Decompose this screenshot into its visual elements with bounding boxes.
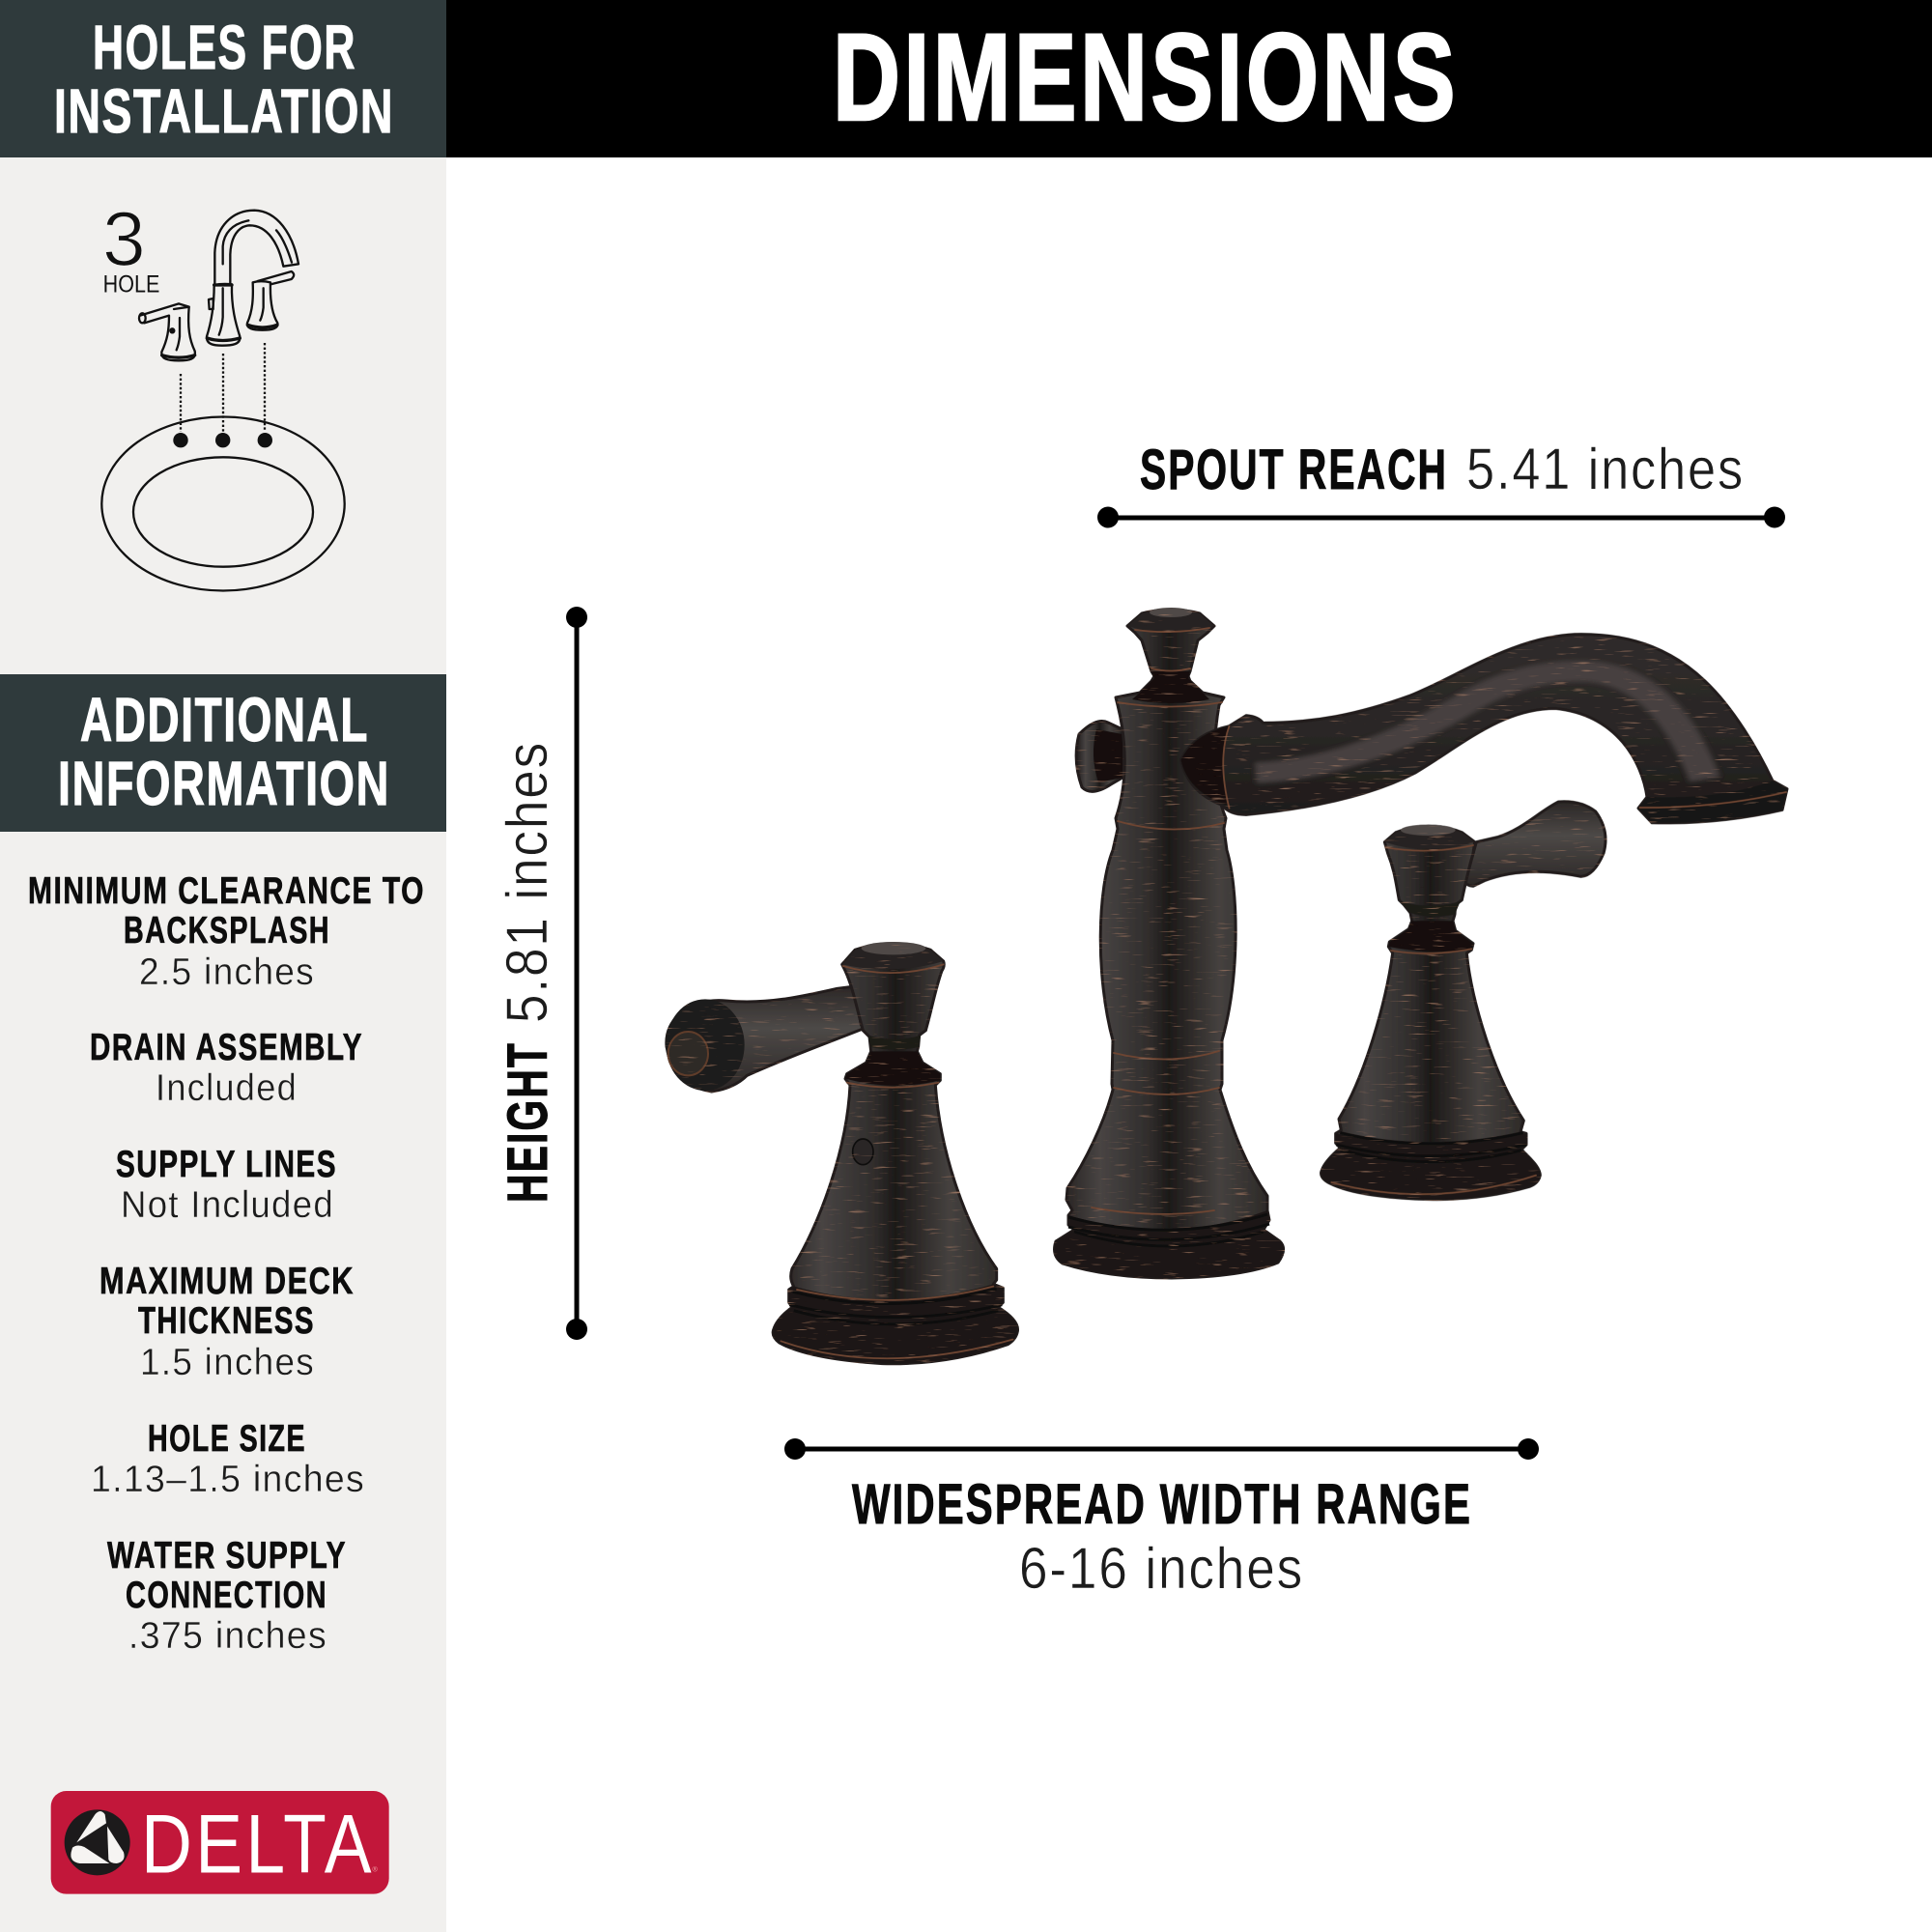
text block: water supply connection: WATER SUPPLY <box>107 1535 347 1577</box>
panel: sidebar background <box>0 0 446 1932</box>
text block: maximum deck thickness: THICKNESS <box>138 1300 315 1342</box>
dimension: spout reach: 5.41 inches <box>1466 437 1745 501</box>
text block: water supply connection: .375 inches <box>128 1615 327 1657</box>
dimension: height <box>495 607 587 1340</box>
dimension: widespread width range: WIDESPREAD WIDTH RANGE <box>852 1473 1472 1536</box>
icon: line art left handle <box>139 303 195 360</box>
icon: sink basin with holes <box>101 417 345 591</box>
text block: water supply connection <box>107 1535 347 1657</box>
center body <box>1055 608 1284 1278</box>
text block: water supply connection: CONNECTION <box>126 1575 327 1616</box>
heading: additional information <box>0 674 446 832</box>
heading: holes for installation <box>0 0 446 157</box>
label: 3 hole: HOLE <box>103 270 159 298</box>
dimension: widespread width range <box>784 1438 1539 1601</box>
text block: minimum clearance <box>28 870 425 993</box>
left valve and lever <box>666 942 1018 1364</box>
icon: three hole faucet and sink diagram <box>101 195 345 591</box>
right valve and lever <box>1321 802 1605 1200</box>
text block: drain assembly <box>90 1027 363 1109</box>
text block: supply lines: Not Included <box>121 1184 334 1226</box>
logo: delta: DELTA <box>141 1798 375 1890</box>
text block: maximum deck thickness: MAXIMUM DECK <box>99 1261 355 1302</box>
label: 3 hole: 3 <box>102 195 146 281</box>
logo: delta: ® <box>372 1864 378 1873</box>
text block: hole size: HOLE SIZE <box>148 1418 306 1460</box>
icon: line art right handle <box>247 271 294 330</box>
heading: holes for installation: HOLES FOR <box>93 13 356 82</box>
heading: holes for installation: INSTALLATION <box>54 76 394 146</box>
text block: supply lines <box>116 1144 337 1226</box>
title: dimensions <box>446 0 1932 157</box>
text block: maximum deck thickness <box>99 1261 355 1383</box>
text block: supply lines: SUPPLY LINES <box>116 1144 337 1185</box>
text block: minimum clearance: 2.5 inches <box>139 952 315 993</box>
dimension: height: HEIGHT <box>497 1041 559 1203</box>
icon: line art faucet spout <box>207 211 298 346</box>
heading: additional information: INFORMATION <box>58 749 390 818</box>
dotted guide lines <box>181 343 265 432</box>
title: dimensions: DIMENSIONS <box>833 9 1459 147</box>
text block: hole size: 1.13–1.5 inches <box>91 1459 365 1500</box>
dimension: widespread width range: 6-16 inches <box>1019 1536 1304 1601</box>
text block: drain assembly: DRAIN ASSEMBLY <box>90 1027 363 1068</box>
text block: drain assembly: Included <box>156 1067 298 1109</box>
dimension: spout reach <box>1097 437 1785 527</box>
dimension: height: 5.81 inches <box>495 741 559 1023</box>
product photo: three piece bronze faucet <box>666 608 1787 1364</box>
label: 3 hole <box>102 195 159 298</box>
text block: minimum clearance: MINIMUM CLEARANCE TO <box>28 870 425 912</box>
text block: hole size <box>91 1418 365 1500</box>
center spout <box>1180 635 1787 823</box>
dimension: spout reach: SPOUT REACH <box>1140 439 1448 501</box>
heading: additional information: ADDITIONAL <box>80 685 369 754</box>
logo: delta <box>51 1791 389 1894</box>
text block: minimum clearance: BACKSPLASH <box>124 910 330 952</box>
text block: maximum deck thickness: 1.5 inches <box>140 1342 315 1383</box>
